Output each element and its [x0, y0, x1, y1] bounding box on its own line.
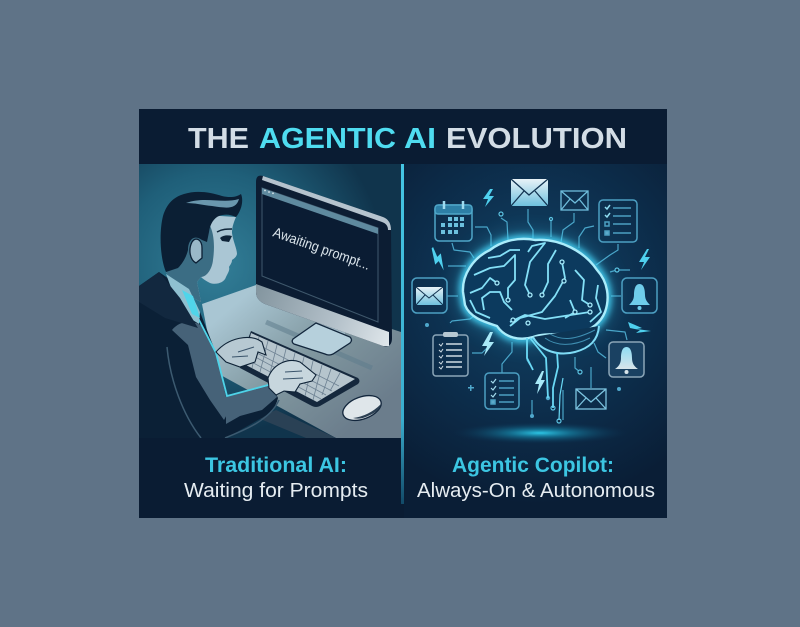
person: [139, 192, 316, 438]
title: AI: [404, 123, 436, 155]
caption: traditional AI: Waiting for Prompts: [184, 480, 368, 502]
icon: calendar: [435, 201, 472, 241]
caption: agentic copilot: Always-On & Autonomous: [417, 480, 655, 502]
person: hair: [161, 192, 242, 272]
monitor stand: [292, 322, 352, 356]
icon: bolt right: [639, 249, 650, 270]
icon: bell box upper: [622, 278, 657, 313]
wall backdrop: [139, 164, 401, 438]
panel: agentic copilot scene: [404, 164, 667, 518]
person: neck and face: [166, 215, 237, 302]
title: THE: [188, 123, 249, 155]
infographic canvas: [139, 109, 667, 518]
trace nodes: [499, 212, 619, 423]
caption: agentic copilot: [417, 454, 655, 502]
icon: clipboard: [433, 332, 468, 376]
icon: bolt centre: [535, 371, 545, 394]
brain: circuit folds: [470, 243, 601, 326]
desk: [202, 285, 401, 438]
icon: top checklist: [599, 200, 637, 242]
screen title bar: [262, 188, 378, 234]
caption: traditional AI: Traditional AI:: [205, 454, 347, 477]
monitor screen: [262, 188, 378, 322]
icon: bell box lower: [609, 342, 644, 377]
mouse: [342, 394, 382, 422]
icon: envelope box: [412, 278, 447, 313]
floor glow: [452, 422, 628, 444]
brain: [463, 239, 608, 353]
icon: bolt lower right: [628, 322, 651, 333]
title: EVOLUTION: [446, 123, 627, 155]
person: torso and arm: [139, 272, 278, 438]
window dots: [264, 190, 274, 194]
icon: bolt left: [425, 246, 451, 272]
title: [188, 123, 627, 155]
icon: bolt top left: [483, 189, 494, 207]
monitor: [256, 176, 392, 346]
icon: bottom envelope: [576, 389, 606, 409]
infographic card: [139, 109, 667, 518]
person: back hand: [216, 337, 266, 367]
brain stem circuits: [527, 338, 563, 420]
icon: bolt lower left: [482, 332, 494, 356]
person: front hand: [268, 361, 316, 395]
keyboard: [239, 331, 360, 407]
icon: small envelope: [561, 191, 588, 210]
caption: traditional AI: [184, 454, 368, 502]
loose dots and sparks: [425, 323, 621, 418]
circuit traces: [447, 209, 630, 420]
icon: large envelope: [511, 179, 548, 206]
caption: agentic copilot: Agentic Copilot:: [452, 454, 614, 477]
screen text: Awaiting prompt...: [271, 224, 372, 273]
icon: bottom checklist: [485, 373, 519, 409]
panel: traditional AI scene: [139, 164, 401, 438]
brain: cerebellum: [533, 326, 599, 353]
divider: [401, 164, 404, 504]
title: AGENTIC: [259, 123, 396, 155]
person: collar: [166, 274, 200, 324]
person: ear: [190, 239, 202, 263]
